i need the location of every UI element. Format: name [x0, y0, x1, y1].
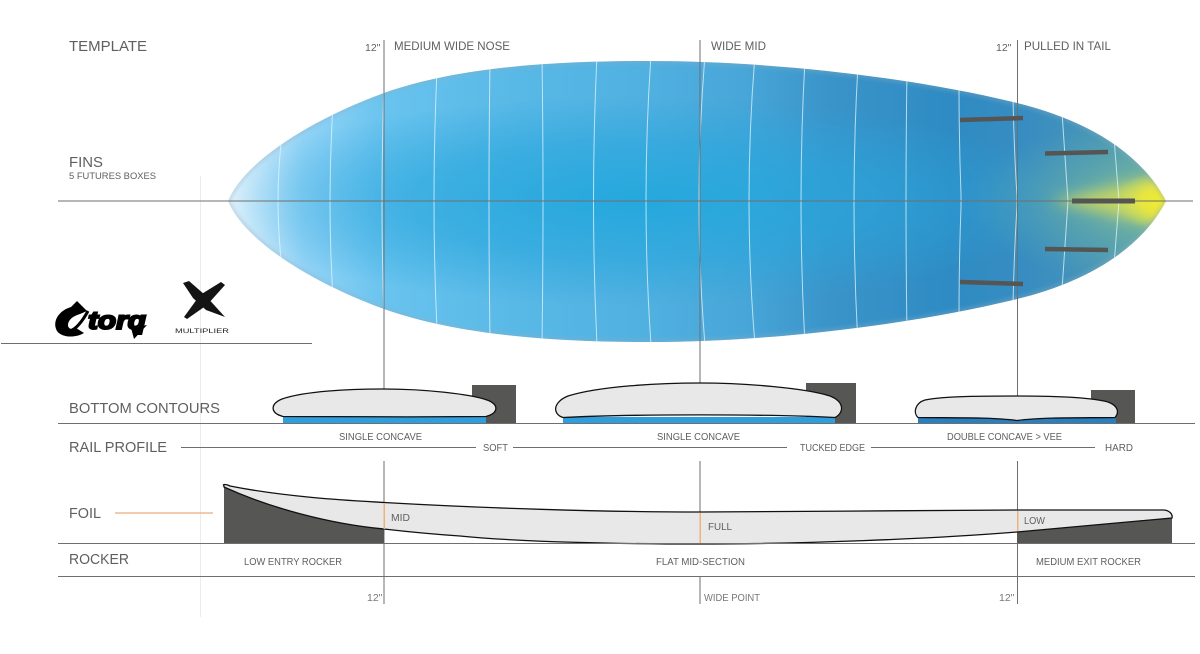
rocker captions: MEDIUM EXIT ROCKER	[1036, 557, 1141, 568]
vertical reference lines	[384, 40, 1018, 604]
logo: multiplier: MULTIPLIER	[175, 329, 230, 335]
bottom scale labels	[367, 592, 1015, 604]
template labels	[365, 39, 1111, 54]
contour section 2	[556, 383, 856, 424]
logo: torq	[55, 301, 147, 339]
foil labels: FULL	[708, 522, 732, 533]
rail profile scale	[181, 443, 1133, 454]
foil pointer	[115, 512, 213, 514]
logo: torq: torq	[88, 307, 146, 335]
heading: rocker: ROCKER	[69, 552, 129, 568]
heading: fins: FINS	[69, 155, 103, 171]
heading: fins: 5 FUTURES BOXES	[69, 171, 156, 181]
faint guide line	[200, 176, 201, 617]
foil labels	[391, 513, 1046, 533]
contour baseline	[58, 423, 1195, 424]
rocker captions: FLAT MID-SECTION	[656, 557, 745, 568]
rocker captions: LOW ENTRY ROCKER	[244, 557, 342, 568]
logo: multiplier	[175, 281, 230, 335]
contour captions: SINGLE CONCAVE	[339, 432, 422, 443]
foil labels: MID	[391, 513, 410, 524]
template labels: 12"	[996, 42, 1012, 54]
rocker rule lines	[58, 543, 1195, 577]
bottom scale labels: WIDE POINT	[704, 593, 760, 604]
heading: rail profile: RAIL PROFILE	[69, 440, 167, 456]
heading: fins	[69, 155, 156, 181]
contour captions: SINGLE CONCAVE	[657, 432, 740, 443]
foil and rocker profile	[223, 484, 1172, 544]
surfboard template outline	[200, 55, 1175, 350]
heading: foil: FOIL	[69, 506, 101, 522]
divider under logos	[1, 343, 312, 344]
centre line	[58, 200, 1193, 202]
bottom scale labels: 12"	[367, 592, 383, 604]
template labels: PULLED IN TAIL	[1024, 39, 1111, 53]
contour captions: DOUBLE CONCAVE > VEE	[947, 432, 1062, 443]
rail profile scale: SOFT	[483, 443, 508, 454]
thickness ticks	[384, 503, 1018, 543]
contour section 1	[273, 385, 516, 424]
rail profile scale: TUCKED EDGE	[800, 443, 865, 454]
template labels: WIDE MID	[711, 39, 766, 53]
bottom scale labels: 12"	[999, 592, 1015, 604]
rocker captions	[244, 557, 1141, 568]
rail profile scale: HARD	[1105, 443, 1133, 454]
heading: template: TEMPLATE	[69, 39, 147, 55]
template labels: 12"	[365, 42, 381, 54]
fin boxes	[960, 118, 1135, 284]
heading: bottom contours: BOTTOM CONTOURS	[69, 401, 220, 417]
contour section 3	[915, 390, 1135, 424]
template labels: MEDIUM WIDE NOSE	[394, 39, 510, 53]
contour captions	[339, 432, 1062, 443]
foil labels: LOW	[1024, 516, 1046, 527]
